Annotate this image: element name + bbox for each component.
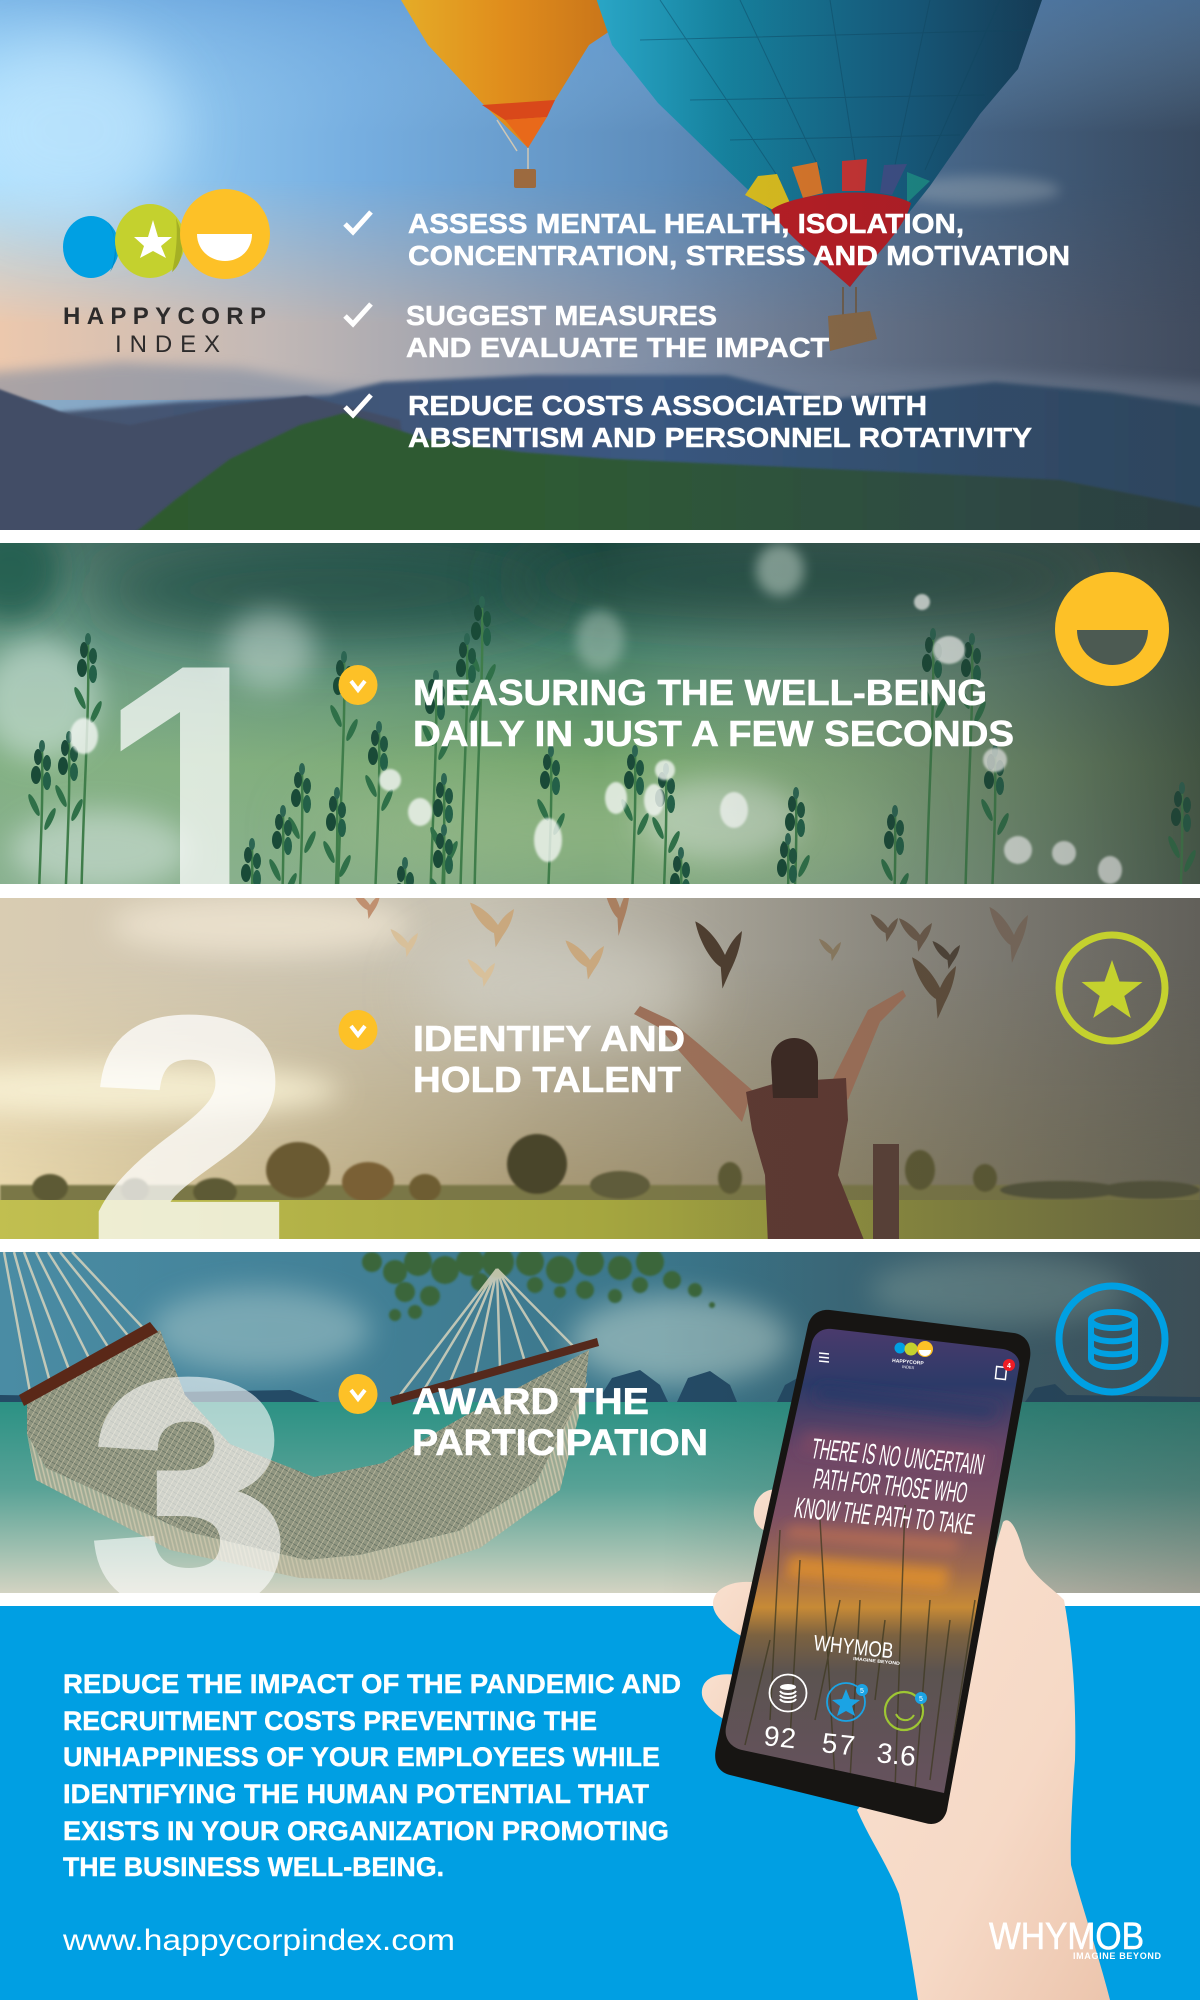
text: CONCENTRATION, STRESS AND MOTIVATION bbox=[408, 240, 1070, 271]
hand holding phone bbox=[702, 1489, 1110, 2000]
text: SUGGEST MEASURES bbox=[406, 300, 717, 331]
quote: PATH FOR THOSE WHO bbox=[811, 1463, 970, 1510]
tagline: IMAGINE BEYOND bbox=[1073, 1951, 1162, 1961]
screen app logo: INDEX bbox=[902, 1364, 915, 1370]
arms bbox=[634, 1006, 752, 1122]
tree line bbox=[0, 1134, 1200, 1206]
net bbox=[27, 1330, 589, 1560]
screen stat: database: 92 bbox=[762, 1720, 797, 1754]
heading step 3: PARTICIPATION bbox=[412, 1422, 708, 1463]
field bbox=[0, 1200, 1200, 1239]
fingers bbox=[702, 1489, 785, 1728]
woman bbox=[634, 990, 906, 1245]
benefit 1 bbox=[345, 208, 1070, 271]
chevron badge bbox=[338, 1374, 378, 1414]
heading step 2: IDENTIFY AND bbox=[413, 1018, 685, 1059]
closing paragraph: REDUCE THE IMPACT OF THE PANDEMIC AND bbox=[63, 1669, 681, 1699]
text: REDUCE COSTS ASSOCIATED WITH bbox=[408, 390, 927, 421]
screen whymob logo: WHYMOB bbox=[812, 1630, 895, 1663]
text: AND EVALUATE THE IMPACT bbox=[406, 332, 829, 363]
screen sky streaks and grass bbox=[745, 1385, 1000, 1790]
check icon bbox=[345, 304, 371, 324]
ropes bbox=[4, 1252, 575, 1395]
phone: THERE IS NO UNCERTAIN bbox=[809, 1433, 987, 1481]
check icon bbox=[345, 212, 371, 232]
panel: step 1 flowers bbox=[0, 520, 1200, 1186]
screen menu icon bbox=[819, 1353, 829, 1362]
screen stat: star: 5 bbox=[860, 1688, 864, 1695]
phone screen bbox=[726, 1329, 1019, 1793]
tree foliage bbox=[362, 1246, 715, 1321]
hair bbox=[771, 1038, 818, 1098]
logo: HappyCorp Index bbox=[63, 189, 270, 358]
palm and thumb bbox=[857, 1520, 1110, 2000]
icon: smile bbox=[1055, 572, 1169, 686]
icon: star bbox=[1059, 935, 1165, 1041]
right shading bbox=[0, 1252, 1200, 1593]
shirt and skirt bbox=[746, 1078, 866, 1245]
bar right bbox=[390, 1338, 599, 1405]
screen stat: smile bbox=[875, 1692, 927, 1772]
logo sub-wordmark: INDEX bbox=[115, 331, 220, 358]
fringe bbox=[27, 1380, 588, 1580]
big number 2: 2 bbox=[92, 954, 288, 1311]
chevron badge bbox=[338, 665, 378, 705]
big number 3: 3 bbox=[92, 1316, 288, 1673]
bar left bbox=[19, 1322, 158, 1406]
text: ABSENTISM AND PERSONNEL ROTATIVITY bbox=[408, 422, 1032, 453]
flowers bbox=[26, 594, 1198, 1186]
screen stat: database bbox=[762, 1674, 806, 1754]
screen app logo: HAPPYCORP bbox=[892, 1358, 925, 1367]
closing paragraph: UNHAPPINESS OF YOUR EMPLOYEES WHILE bbox=[63, 1742, 660, 1772]
whymob logo bbox=[989, 1916, 1162, 1961]
phone bbox=[715, 1310, 1030, 1824]
closing paragraph: IDENTIFYING THE HUMAN POTENTIAL THAT bbox=[63, 1779, 650, 1809]
closing paragraph: RECRUITMENT COSTS PREVENTING THE bbox=[63, 1706, 597, 1736]
closing paragraph: EXISTS IN YOUR ORGANIZATION PROMOTING bbox=[63, 1816, 669, 1846]
logo blue circle bbox=[63, 216, 119, 278]
panel: step 2 woman and birds bbox=[0, 880, 1200, 1311]
logo wordmark: HAPPYCORP bbox=[63, 303, 266, 330]
heading step 1: MEASURING THE WELL-BEING bbox=[413, 672, 987, 713]
phone body bbox=[715, 1310, 1030, 1824]
screen whymob logo: IMAGINE BEYOND bbox=[853, 1656, 901, 1666]
notification icon bbox=[995, 1359, 1015, 1379]
closing paragraph: THE BUSINESS WELL-BEING. bbox=[63, 1852, 444, 1882]
website url: www.happycorpindex.com bbox=[62, 1924, 455, 1957]
screen stat: star bbox=[820, 1683, 868, 1761]
distant islands bbox=[0, 1370, 1200, 1402]
heading step 1: DAILY IN JUST A FEW SECONDS bbox=[413, 713, 1014, 754]
heading step 2: HOLD TALENT bbox=[413, 1059, 681, 1100]
birds bbox=[352, 880, 1028, 1019]
screen stat: smile: 5 bbox=[919, 1696, 923, 1703]
panel: blue footer bbox=[0, 1606, 1200, 2000]
mountains bbox=[0, 356, 1200, 530]
text: ASSESS MENTAL HEALTH, ISOLATION, bbox=[408, 208, 964, 239]
benefit 2 bbox=[343, 302, 829, 358]
right shading bbox=[0, 543, 1200, 884]
panel: step 3 beach and hammock bbox=[0, 1246, 1200, 1673]
logo green circle with star bbox=[115, 204, 185, 278]
check icon bbox=[345, 395, 371, 415]
blue balloon bbox=[595, 0, 1042, 351]
big number 1: 1 bbox=[96, 584, 296, 1011]
benefit 3 bbox=[345, 390, 1032, 453]
hammock bbox=[4, 1252, 599, 1580]
heading step 3: AWARD THE bbox=[412, 1381, 649, 1422]
screen stat: star: 57 bbox=[820, 1727, 856, 1761]
screen stat: smile: 3.6 bbox=[875, 1737, 917, 1772]
chevron badge bbox=[338, 1010, 378, 1050]
icon: database bbox=[1059, 1286, 1165, 1392]
wordmark: WHYMOB bbox=[989, 1916, 1144, 1958]
right side shading bbox=[776, 0, 1200, 507]
sunset background bbox=[0, 895, 1200, 1239]
orange balloon bbox=[398, 0, 610, 188]
fence post bbox=[873, 1144, 899, 1244]
beach background bbox=[0, 1252, 1200, 1593]
quote: KNOW THE PATH TO TAKE bbox=[792, 1492, 977, 1541]
right shading bbox=[0, 898, 1200, 1239]
footer background bbox=[0, 1606, 1200, 2000]
quote bbox=[792, 1433, 987, 1541]
sky background bbox=[0, 0, 1200, 413]
logo yellow smile bbox=[180, 189, 270, 279]
screen app logo bbox=[892, 1341, 933, 1370]
panel: hero with balloons bbox=[0, 0, 1200, 560]
notification icon: 4 bbox=[1007, 1363, 1011, 1370]
meadow background bbox=[0, 520, 1200, 890]
